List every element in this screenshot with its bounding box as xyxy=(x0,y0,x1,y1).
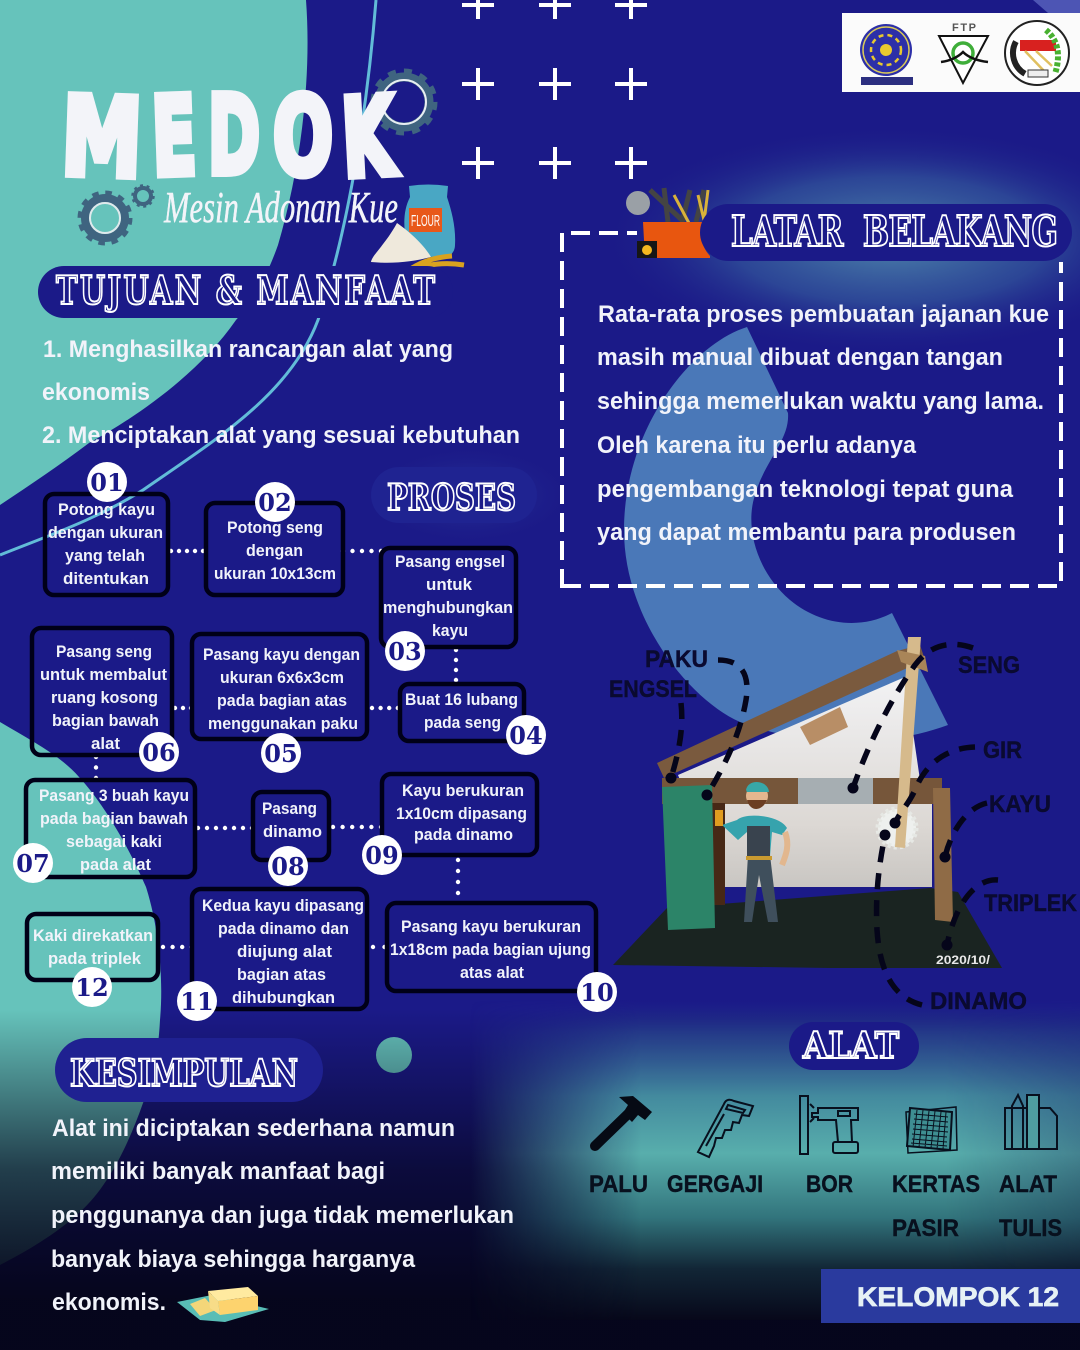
machine labels: DINAMO xyxy=(930,988,1027,1015)
heading: tujuan dan manfaat: TUJUAN & MANFAAT xyxy=(56,269,435,314)
heading: proses xyxy=(371,467,537,523)
tall stick xyxy=(895,637,921,848)
step 01 xyxy=(45,462,168,595)
step 06: ruang kosong xyxy=(51,689,158,707)
machine labels: SENG xyxy=(958,652,1020,679)
step 06: 06 xyxy=(142,738,176,767)
step 09: 09 xyxy=(365,841,399,870)
step 06: alat xyxy=(91,735,121,753)
step 11: dihubungkan xyxy=(232,989,335,1007)
step 06: Pasang seng xyxy=(56,643,152,661)
step 02: 02 xyxy=(258,488,292,517)
logo: university xyxy=(860,24,913,85)
step 04: 04 xyxy=(509,721,543,750)
banner: kelompok 12 xyxy=(821,1269,1080,1323)
machine leaders xyxy=(666,644,998,1005)
heading: latar belakang: LATAR BELAKANG xyxy=(731,206,1058,256)
heading: kesimpulan: KESIMPULAN xyxy=(70,1051,298,1095)
text: latar belakang: sehingga memerlukan waktu yang lama. xyxy=(597,388,1044,415)
step 06 xyxy=(32,628,179,772)
icon: flour bag xyxy=(371,184,464,272)
step 11 xyxy=(177,889,367,1021)
text: kesimpulan: banyak biaya sehingga harganya xyxy=(51,1246,416,1273)
step 10: Pasang kayu berukuran xyxy=(401,918,581,936)
step 04: pada seng xyxy=(424,714,501,732)
step 02: ukuran 10x13cm xyxy=(214,565,336,583)
dark strip xyxy=(712,803,725,905)
step 07 xyxy=(13,780,195,883)
machine labels: PAKU xyxy=(645,646,708,673)
step 07: sebagai kaki xyxy=(66,833,162,851)
step 07: pada bagian bawah xyxy=(40,810,188,828)
blue crescent xyxy=(624,327,948,742)
step 01: yang telah xyxy=(65,547,145,565)
step 01: dengan ukuran xyxy=(48,524,163,542)
step 10: 10 xyxy=(580,978,614,1007)
heading: alat xyxy=(789,1022,919,1070)
tool labels: PASIR xyxy=(892,1215,959,1242)
gears left xyxy=(80,186,154,243)
step 09: pada dinamo xyxy=(414,826,513,844)
step 05: Pasang kayu dengan xyxy=(203,646,360,664)
step 02 xyxy=(206,482,343,595)
tool labels: BOR xyxy=(806,1171,853,1198)
step 08 xyxy=(253,792,329,886)
logo: faculty: FTP xyxy=(952,22,976,34)
leader: kayu xyxy=(940,803,987,862)
top cross piece xyxy=(897,650,928,672)
teal blob lower left xyxy=(0,722,161,1265)
step 05: pada bagian atas xyxy=(217,692,347,710)
title: O xyxy=(273,75,333,200)
step 03: Pasang engsel xyxy=(395,553,505,571)
step 03: untuk xyxy=(426,576,473,594)
step 11: Kedua kayu dipasang xyxy=(202,897,364,915)
text: kesimpulan xyxy=(51,1115,514,1316)
step 03: menghubungkan xyxy=(383,599,513,617)
step 05: menggunakan paku xyxy=(208,715,358,733)
step 09 xyxy=(362,774,537,875)
step 07: 07 xyxy=(16,849,50,878)
wood block xyxy=(800,707,848,745)
step 01: 01 xyxy=(90,468,124,497)
leader: gir xyxy=(890,747,975,828)
step 04: Buat 16 lubang xyxy=(405,691,518,709)
tool labels: KERTAS xyxy=(892,1171,980,1198)
thin curved line xyxy=(0,0,376,555)
text: tujuan dan manfaat: 1. Menghasilkan rancangan alat yang xyxy=(43,336,453,363)
back wall xyxy=(678,677,932,887)
leader: engsel xyxy=(666,703,682,784)
text: tujuan dan manfaat: ekonomis xyxy=(42,379,150,406)
leader: dinamo xyxy=(877,830,922,1005)
green panel xyxy=(662,785,715,930)
step 02: Potong seng xyxy=(227,519,323,537)
text: latar belakang xyxy=(597,301,1049,546)
text: tujuan dan manfaat: 2. Menciptakan alat yang sesuai kebutuhan xyxy=(42,422,520,449)
teal blob top left xyxy=(0,0,308,505)
title xyxy=(60,74,399,202)
teal dot xyxy=(376,1037,412,1073)
step 05: ukuran 6x6x3cm xyxy=(220,669,344,687)
right post xyxy=(933,788,953,922)
subtitle: Mesin Adonan Kue xyxy=(163,183,398,232)
plus signs xyxy=(462,0,647,179)
tool labels: PALU xyxy=(589,1171,648,1198)
step 12 xyxy=(27,914,158,1007)
step 11: bagian atas xyxy=(237,966,326,984)
icon: toolbox xyxy=(626,188,712,258)
bottom teal band xyxy=(478,1012,1080,1310)
step 08: Pasang xyxy=(262,800,317,818)
worker figure xyxy=(715,782,787,922)
icon: butter xyxy=(177,1287,269,1322)
text: latar belakang: pengembangan teknologi tepat guna xyxy=(597,476,1014,503)
step 10: 1x18cm pada bagian ujung xyxy=(390,941,591,959)
text: kesimpulan: penggunanya dan juga tidak memerlukan xyxy=(51,1202,514,1229)
text: tujuan dan manfaat xyxy=(42,336,520,449)
heading: alat: ALAT xyxy=(802,1024,899,1067)
dashed frame: latar belakang xyxy=(562,233,1061,588)
text: kesimpulan: ekonomis. xyxy=(52,1289,166,1316)
title: K xyxy=(339,75,399,202)
machine photo xyxy=(613,637,1002,968)
gear wheel xyxy=(878,809,916,847)
roof beam xyxy=(657,645,925,778)
icon: hammer xyxy=(595,1096,652,1146)
step 02: dengan xyxy=(246,542,303,560)
step 06: bagian bawah xyxy=(52,712,159,730)
process connectors xyxy=(96,551,458,947)
step 12: pada triplek xyxy=(48,950,142,968)
step 01: Potong kayu xyxy=(58,501,155,519)
tool labels: GERGAJI xyxy=(667,1171,763,1198)
logo: faculty xyxy=(939,22,988,83)
step 03: kayu xyxy=(432,622,468,640)
step 09: 1x10cm dipasang xyxy=(396,805,527,823)
text: latar belakang: Oleh karena itu perlu adanya xyxy=(597,432,917,459)
heading: proses: PROSES xyxy=(387,476,516,519)
title: E xyxy=(150,74,198,201)
step 06: untuk membalut xyxy=(40,666,167,684)
bottom dark gradient xyxy=(0,1010,1080,1350)
icon: stationery xyxy=(1005,1095,1057,1149)
step 10 xyxy=(387,903,617,1012)
logo: student association xyxy=(1004,20,1070,86)
step 09: Kayu berukuran xyxy=(402,782,524,800)
step 12: Kaki direkatkan xyxy=(33,927,153,945)
title: D xyxy=(208,74,260,199)
step 07: Pasang 3 buah kayu xyxy=(39,787,189,805)
icon: saw xyxy=(698,1100,753,1157)
step 03 xyxy=(381,548,516,671)
gear top right of title xyxy=(373,71,435,133)
leader: paku xyxy=(702,660,747,800)
horizontal beam xyxy=(662,778,942,804)
base board xyxy=(613,888,1002,968)
step 11: 11 xyxy=(180,987,214,1016)
machine labels: ENGSEL xyxy=(609,676,697,703)
icon: flour bag: FLOUR xyxy=(411,213,440,230)
date stamp: 2020/10/ xyxy=(936,955,991,967)
step 11: diujung alat xyxy=(237,943,333,961)
step 04 xyxy=(400,684,546,755)
icon: sandpaper xyxy=(906,1107,957,1153)
step 08: 08 xyxy=(271,852,305,881)
text: kesimpulan: Alat ini diciptakan sederhana namun xyxy=(52,1115,455,1142)
logo panel xyxy=(842,13,1080,92)
step 01: ditentukan xyxy=(63,570,149,588)
step 07: pada alat xyxy=(80,856,151,874)
step 11: pada dinamo dan xyxy=(218,920,349,938)
step 05: 05 xyxy=(264,739,298,768)
text: kesimpulan: memiliki banyak manfaat bagi xyxy=(51,1158,385,1185)
machine labels xyxy=(609,646,1078,1015)
machine labels: KAYU xyxy=(989,791,1051,818)
text: latar belakang: masih manual dibuat dengan tangan xyxy=(597,344,1003,371)
text: latar belakang: Rata-rata proses pembuatan jajanan kue xyxy=(598,301,1049,328)
leader: seng xyxy=(848,644,973,794)
tool labels: TULIS xyxy=(999,1215,1062,1242)
step 12: 12 xyxy=(75,973,109,1002)
heading: kesimpulan xyxy=(55,1038,323,1102)
title: M xyxy=(60,75,144,202)
tool labels xyxy=(589,1171,1062,1242)
icon: drill xyxy=(800,1096,858,1154)
banner: kelompok 12: KELOMPOK 12 xyxy=(857,1282,1059,1312)
machine labels: GIR xyxy=(983,737,1022,764)
tool labels: ALAT xyxy=(999,1171,1057,1198)
leader: triplek xyxy=(942,880,998,950)
text: latar belakang: yang dapat membantu para produsen xyxy=(597,519,1016,546)
step 08: dinamo xyxy=(263,823,322,841)
step 10: atas alat xyxy=(460,964,524,982)
zinc sheet xyxy=(798,778,873,804)
step 05 xyxy=(192,634,367,773)
step 03: 03 xyxy=(388,637,422,666)
